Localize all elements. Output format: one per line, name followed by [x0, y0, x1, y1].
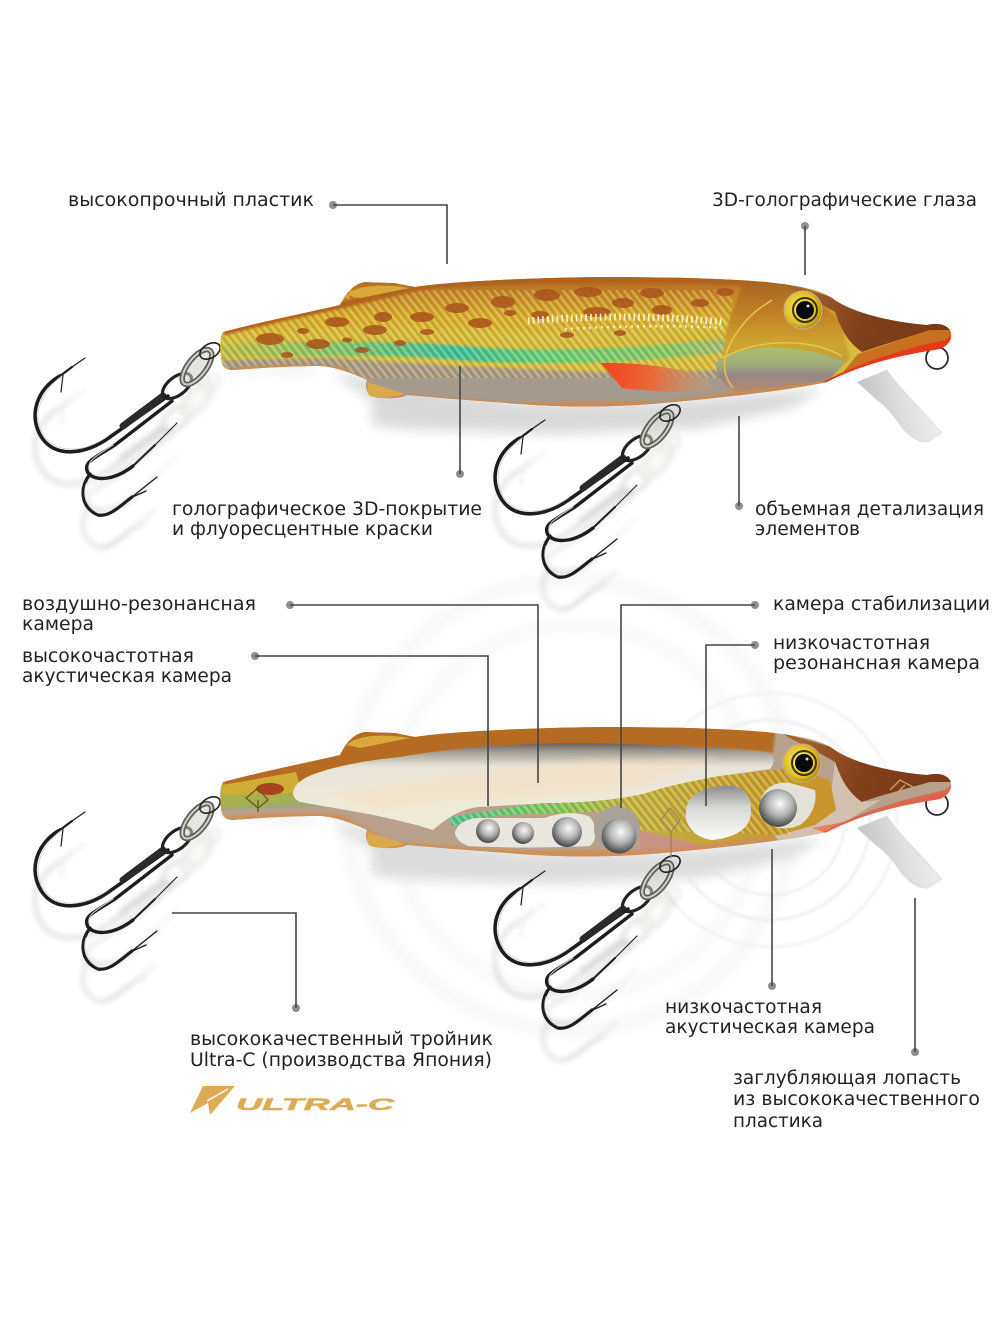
- tail screw-eye: [246, 788, 268, 812]
- lateral line: [528, 317, 722, 322]
- ball bearing 3: [552, 817, 582, 847]
- top lure belly treble hook: [495, 401, 683, 577]
- callout: diving lip: заглубляющая лопасть: [733, 1068, 961, 1089]
- top lure shadow: [228, 368, 825, 434]
- sound wave rings behind cutaway lure: [345, 580, 897, 1030]
- top lure tail treble hook: [35, 339, 223, 515]
- callout: low-frequency acoustic chamber: акустическая камера: [665, 1017, 875, 1038]
- line tie ring: [926, 347, 948, 369]
- rose tint by front chamber: [640, 830, 700, 852]
- callout: holographic coating: голографическое 3D-покрытие: [172, 499, 482, 520]
- callout: volumetric detailing: объемная детализация: [755, 499, 984, 520]
- bottom lure belly hook shadow: [495, 884, 683, 1060]
- callout: high-strength plastic: [68, 190, 447, 264]
- bottom lure: cutaway with acoustic chambers: [220, 727, 956, 888]
- callout: volumetric detailing: элементов: [755, 519, 860, 540]
- top lure: holographic pike: [220, 277, 956, 442]
- bottom lure tail hook shadow: [35, 825, 223, 1001]
- top lure belly hook shadow: [495, 433, 683, 609]
- holographic strip: [450, 768, 836, 845]
- stabilization chamber with ball: [594, 806, 640, 854]
- ball bearing 1: [476, 819, 500, 843]
- callout: 3D holographic eyes: [712, 190, 977, 275]
- head brown top: [782, 283, 956, 352]
- callout: low-frequency acoustic chamber: [665, 849, 875, 1038]
- callout: low-frequency acoustic chamber: низкочастотная: [665, 997, 822, 1018]
- callout: diving lip: [733, 898, 980, 1132]
- callout: diving lip: пластика: [733, 1111, 823, 1132]
- ball bearing 2: [512, 822, 534, 844]
- pectoral fin: [601, 363, 714, 391]
- bottom lure belly treble hook: [495, 852, 683, 1028]
- callout: air resonance chamber: [22, 594, 538, 783]
- chamber holographic wash: [330, 758, 720, 810]
- callout: high-strength plastic: высокопрочный пластик: [68, 190, 314, 211]
- callout: volumetric detailing: [735, 416, 984, 540]
- callout: stabilization chamber: [621, 594, 990, 808]
- callout: 3D holographic eyes: 3D-голографические глаза: [712, 190, 977, 211]
- holographic eye: [784, 291, 822, 329]
- pelvic fin: [367, 382, 405, 398]
- bottom lure tail treble hook: [35, 793, 223, 969]
- diving lip: [857, 370, 942, 442]
- lower jaw: [840, 330, 952, 376]
- callout: low-frequency resonance chamber: низкочастотная: [773, 633, 930, 654]
- callout: low-frequency resonance chamber: [706, 633, 980, 806]
- diving lip: [857, 793, 948, 888]
- callout: Ultra-C treble hook: Ultra-C (производства Япония): [190, 1050, 492, 1071]
- bottom lure shadow: [228, 818, 825, 884]
- logo: Ultra-C: [190, 1086, 396, 1115]
- shell: [220, 727, 956, 857]
- callout: high-frequency acoustic chamber: высокочастотная: [22, 646, 194, 667]
- callout: diving lip: из высококачественного: [733, 1089, 980, 1110]
- logo: Ultra-C: ULTRA-C: [236, 1095, 396, 1114]
- callout: Ultra-C treble hook: высококачественный тройник: [190, 1029, 493, 1050]
- callout: air resonance chamber: камера: [22, 614, 94, 635]
- callout: low-frequency resonance chamber: резонансная камера: [773, 653, 980, 674]
- callout: high-frequency acoustic chamber: [22, 646, 488, 806]
- dorsal fin: [347, 286, 410, 298]
- holographic eye: [783, 744, 821, 782]
- translucent jaw: [774, 762, 880, 840]
- callout: high-frequency acoustic chamber: акустическая камера: [22, 666, 232, 687]
- head brown: [782, 733, 956, 802]
- high-frequency chamber: [455, 813, 596, 848]
- callout: stabilization chamber: камера стабилизации: [773, 594, 990, 615]
- spots: [256, 287, 734, 358]
- red mouth stripe: [823, 335, 952, 382]
- belly hanger screw-eye: [661, 808, 680, 858]
- callout: holographic coating: и флуоресцентные краски: [172, 519, 433, 540]
- head gold cheek: [723, 279, 850, 392]
- low-frequency resonance chamber: [686, 786, 751, 840]
- callout: air resonance chamber: воздушно-резонансная: [22, 594, 256, 615]
- gill plate: [716, 347, 845, 392]
- body painted layers: [220, 277, 956, 415]
- top lure tail hook shadow: [35, 371, 223, 547]
- callout: holographic coating: [172, 366, 482, 540]
- callout: Ultra-C treble hook: [172, 913, 493, 1071]
- main air-resonance chamber: [293, 743, 774, 830]
- rear ball chamber with ball: [759, 783, 816, 828]
